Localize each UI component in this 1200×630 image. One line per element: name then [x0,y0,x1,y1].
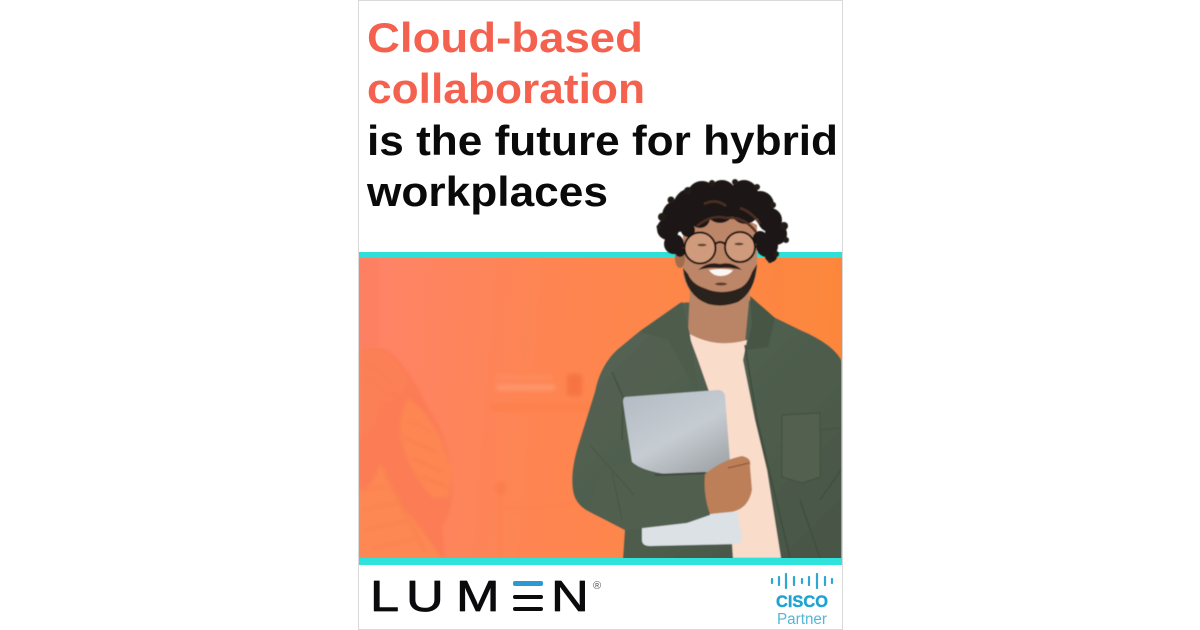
soul patch [715,282,727,286]
eyes [698,243,744,246]
shirt body [572,298,842,560]
arm fold shadow [612,372,623,440]
title line: Cloud-based: Cloud-based [367,14,643,61]
face [682,216,758,291]
plant dark mass [359,348,453,559]
neck [688,290,750,344]
partner label: Partner [777,611,827,628]
laptop lid [623,390,731,474]
ghost background: wall shelf and objects [492,374,582,492]
cisco bars icon [772,574,832,588]
panel: page card [358,0,842,630]
ear [674,254,686,268]
plant right leaf [402,402,450,496]
collar left [680,302,692,341]
plant leaves [359,348,453,559]
logo E bars [511,578,545,613]
smile [709,269,733,276]
moustache [698,263,742,270]
title line: is the future for hybrid: is the future for hybrid [367,117,838,164]
title line: workplaces: workplaces [366,168,608,215]
title [366,14,838,215]
t-shirt [688,333,781,558]
glasses [684,232,755,264]
plant upper leaf [359,350,408,440]
person with laptop [572,179,842,560]
hand [705,456,752,514]
logo registered mark: ® [593,580,601,592]
divider bar: bottom teal [359,558,842,565]
cisco wordmark: CISCO [776,593,828,611]
title line: collaboration: collaboration [367,65,645,112]
panel: orange photo background [359,258,842,560]
forearm sleeve [641,472,710,529]
chest pocket [782,413,820,416]
hair frizz [656,179,789,263]
hair [657,180,787,262]
hair curls [697,201,760,232]
logo wordmark: LUMEN [370,572,589,621]
laptop base [642,510,742,546]
beard [683,264,757,306]
logo: Lumen [370,572,601,621]
shirt placket seam [745,345,790,558]
divider bar: top teal [359,252,842,258]
plant leaf veins [362,362,448,552]
collar right [746,296,775,350]
logo: Cisco Partner [772,574,832,628]
plant bottom leaf [359,462,442,559]
